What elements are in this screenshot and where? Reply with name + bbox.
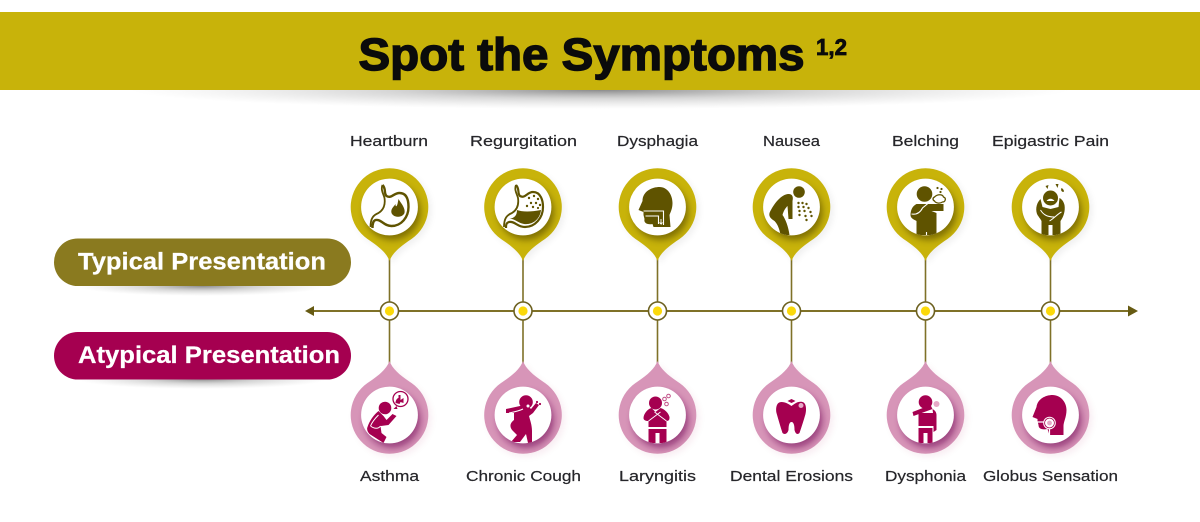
stems (390, 258, 1050, 364)
icon: stomach with acid drop (370, 185, 408, 228)
pill: atypical presentation: Atypical Presentation (78, 342, 340, 369)
symptom: nausea (753, 133, 833, 264)
symptom: dental erosions (730, 361, 853, 485)
icon: person holding stomach (1036, 184, 1065, 235)
icon: person vomiting (769, 186, 813, 235)
marker (887, 361, 967, 457)
pill: atypical presentation (54, 332, 351, 389)
symptom: laryngitis (619, 361, 699, 485)
marker (484, 361, 565, 457)
pill: typical presentation: Typical Presentation (78, 248, 326, 276)
banner bar (0, 12, 1200, 90)
label: Dysphagia (617, 133, 699, 150)
icon: person holding throat (644, 394, 670, 443)
label: Heartburn (350, 133, 428, 150)
symptom: globus sensation (983, 361, 1118, 485)
marker (619, 361, 699, 457)
banner shadow (130, 71, 1070, 109)
timeline axis with arrows (305, 306, 1138, 316)
title: Spot the Symptoms (358, 29, 804, 80)
label: Regurgitation (470, 133, 577, 150)
marker (484, 168, 565, 264)
icon: head with throat lump (1032, 395, 1066, 435)
label: Epigastric Pain (992, 133, 1109, 150)
label: Dysphonia (885, 468, 967, 485)
icon: person coughing into arm (912, 395, 940, 443)
pill: typical presentation (54, 238, 351, 296)
label: Nausea (763, 133, 821, 150)
marker (619, 168, 699, 264)
symptom: regurgitation (470, 133, 577, 264)
marker (753, 168, 833, 264)
symptom: dysphagia (617, 133, 699, 264)
marker (887, 168, 967, 264)
icon: person coughing (506, 395, 541, 443)
symptom: chronic cough (466, 361, 581, 485)
symptom: epigastric pain (992, 133, 1109, 264)
label: Dental Erosions (730, 468, 853, 485)
marker (351, 168, 431, 264)
symptom: heartburn (350, 133, 431, 264)
icon: person belching (910, 186, 945, 235)
label: Belching (892, 133, 959, 150)
icon: stomach with contents (504, 185, 543, 228)
marker (753, 361, 833, 457)
icon: head with throat (638, 187, 672, 227)
timeline nodes (380, 302, 1060, 320)
title references: 1,2 (816, 34, 847, 60)
symptom: belching (887, 133, 967, 264)
symptom: asthma (351, 361, 431, 485)
marker (1012, 168, 1092, 264)
icon: person with lungs bubble (367, 392, 408, 443)
marker (351, 361, 431, 457)
label: Globus Sensation (983, 468, 1118, 485)
marker (1012, 361, 1092, 457)
label: Laryngitis (619, 468, 696, 485)
symptom: dysphonia (885, 361, 967, 485)
label: Chronic Cough (466, 468, 581, 485)
icon: tooth (776, 399, 806, 434)
label: Asthma (360, 468, 420, 485)
title banner (0, 12, 1200, 109)
